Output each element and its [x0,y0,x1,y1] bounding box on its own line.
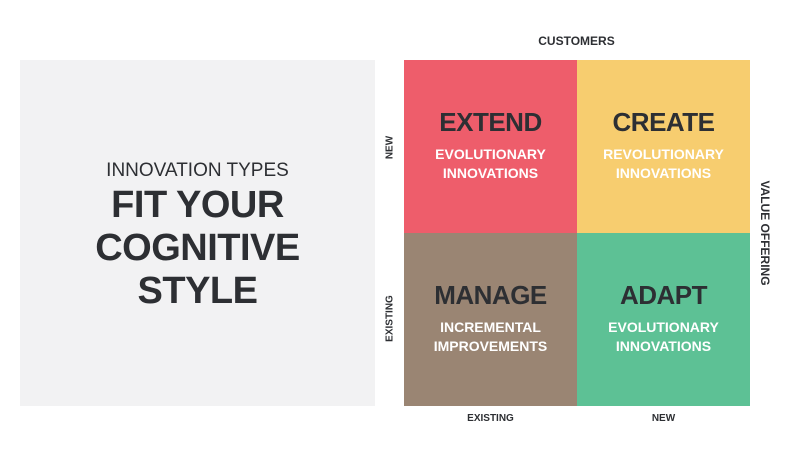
axis label: existing (left): EXISTING [384,295,396,342]
quadrant: extend: INNOVATIONS [443,165,538,181]
quadrant: extend: EXTEND [439,107,542,137]
quadrant: manage: INCREMENTAL [440,319,541,335]
title: COGNITIVE [95,227,300,269]
quadrant: create: REVOLUTIONARY [603,146,724,162]
panel: title card [20,60,375,406]
axis label: customers: CUSTOMERS [538,34,615,48]
axis label: existing (bottom): EXISTING [467,413,514,424]
quadrant: manage: IMPROVEMENTS [434,338,547,354]
axis label: value offering: VALUE OFFERING [758,180,772,286]
matrix [404,60,750,406]
title: STYLE [138,270,257,312]
quadrant: create [577,60,750,233]
quadrant: extend: EVOLUTIONARY [435,146,546,162]
quadrant: extend [404,60,577,233]
quadrant: create: CREATE [613,107,714,137]
quadrant: adapt: EVOLUTIONARY [608,319,719,335]
quadrant: manage: MANAGE [434,280,547,310]
title [95,184,300,312]
quadrant: adapt: INNOVATIONS [616,338,711,354]
quadrant: create: INNOVATIONS [616,165,711,181]
axis label: new (bottom): NEW [652,413,675,424]
axis label: new (left): NEW [384,136,396,159]
quadrant: adapt [577,233,750,406]
subtitle: INNOVATION TYPES [106,160,289,181]
quadrant: manage [404,233,577,406]
quadrant: adapt: ADAPT [620,280,707,310]
title: FIT YOUR [111,184,284,226]
